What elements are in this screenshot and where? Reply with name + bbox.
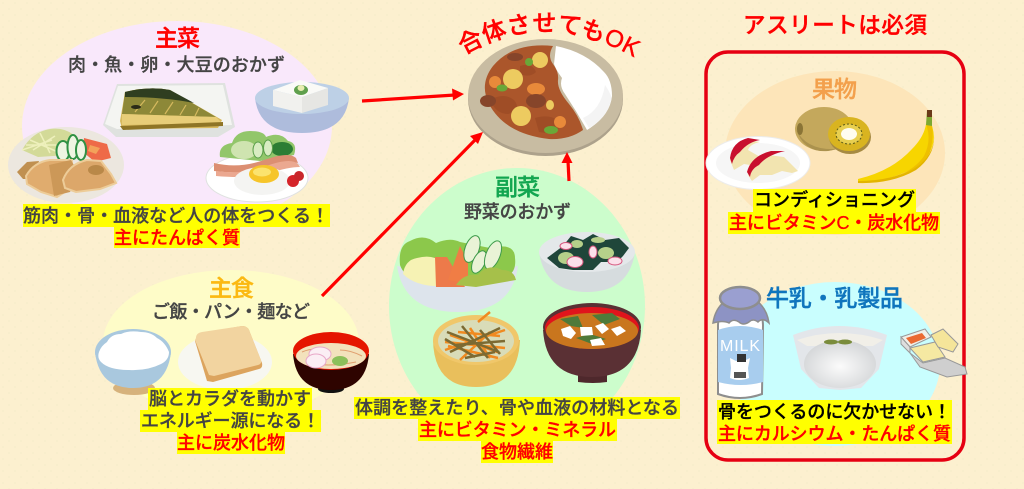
title: 合体させてもOK: 合体させてもOK	[458, 12, 642, 58]
icon: miso soup	[543, 303, 641, 383]
icon: udon bowl	[293, 332, 369, 393]
heading: 副菜: 副菜	[495, 174, 540, 200]
subheading: 副菜 examples: 野菜のおかず	[464, 202, 571, 222]
icon: potato salad bowl	[397, 233, 518, 312]
callout: 主菜 description: 主にたんぱく質	[114, 228, 240, 248]
icon: milk bottle: MILK	[720, 338, 760, 355]
icon: pork plate	[8, 127, 124, 203]
heading: 果物: 果物	[812, 76, 857, 102]
heading: 主食: 主食	[209, 275, 254, 301]
icon: tofu bowl	[255, 80, 349, 133]
heading: 牛乳・乳製品: 牛乳・乳製品	[766, 285, 903, 311]
callout: 主食 description: 脳とカラダを動かす	[149, 389, 311, 409]
icon: kiwi	[795, 107, 871, 154]
arrow: 主食 to curry	[322, 132, 483, 296]
arrow: 副菜 to curry	[562, 152, 572, 181]
icon: rice bowl	[95, 329, 171, 395]
panel: 牛乳・乳製品	[713, 282, 967, 446]
callout: 牛乳 description: 主にカルシウム・たんぱく質	[718, 424, 951, 444]
arrow: 主菜 to curry	[362, 88, 464, 101]
callout: 主食 description	[140, 388, 321, 454]
callout: 主菜 description: 筋肉・骨・血液など人の体をつくる！	[23, 206, 329, 226]
callout: 副菜 description	[354, 397, 680, 463]
icon: milk bottle	[713, 287, 769, 398]
callout: 主食 description: エネルギー源になる！	[141, 411, 320, 431]
icon: kinpira bowl	[433, 312, 520, 387]
subheading: 主食 examples: ご飯・パン・麺など	[152, 302, 310, 322]
icon: butter	[901, 329, 967, 377]
heading: 主菜: 主菜	[155, 25, 200, 51]
callout: 副菜 description: 食物繊維	[481, 442, 553, 462]
callout: 果物 description: 主にビタミンC・炭水化物	[729, 213, 939, 233]
icon: grilled mackerel plate	[103, 83, 235, 137]
icon: banana	[858, 110, 934, 183]
callout: 副菜 description: 主にビタミン・ミネラル	[419, 420, 616, 440]
callout: 主菜 description	[23, 204, 330, 248]
icon: toast plate	[178, 326, 272, 390]
callout: 牛乳 description: 骨をつくるのに欠かせない！	[718, 402, 951, 422]
icon: seaweed salad bowl	[539, 232, 635, 292]
panel: 主食	[95, 270, 369, 454]
subheading: 主菜 examples: 肉・魚・卵・大豆のおかず	[68, 55, 285, 75]
heading: アスリートは必須: アスリートは必須	[743, 13, 927, 38]
icon: apple plate	[706, 136, 810, 190]
icon: yogurt bowl	[793, 326, 887, 390]
panel: athlete box	[706, 52, 967, 460]
callout: 副菜 description: 体調を整えたり、骨や血液の材料となる	[355, 398, 679, 418]
callout: 主食 description: 主に炭水化物	[177, 433, 285, 453]
panel: 副菜	[354, 168, 680, 463]
panel: 主菜	[8, 21, 349, 248]
callout: 果物 description: コンディショニング	[754, 189, 915, 210]
icon: curry plate	[468, 39, 623, 156]
callout: 牛乳 description	[717, 400, 952, 444]
panel: 果物	[706, 71, 945, 235]
icon: bacon and egg plate	[206, 131, 308, 202]
callout: 果物 description	[728, 189, 940, 234]
